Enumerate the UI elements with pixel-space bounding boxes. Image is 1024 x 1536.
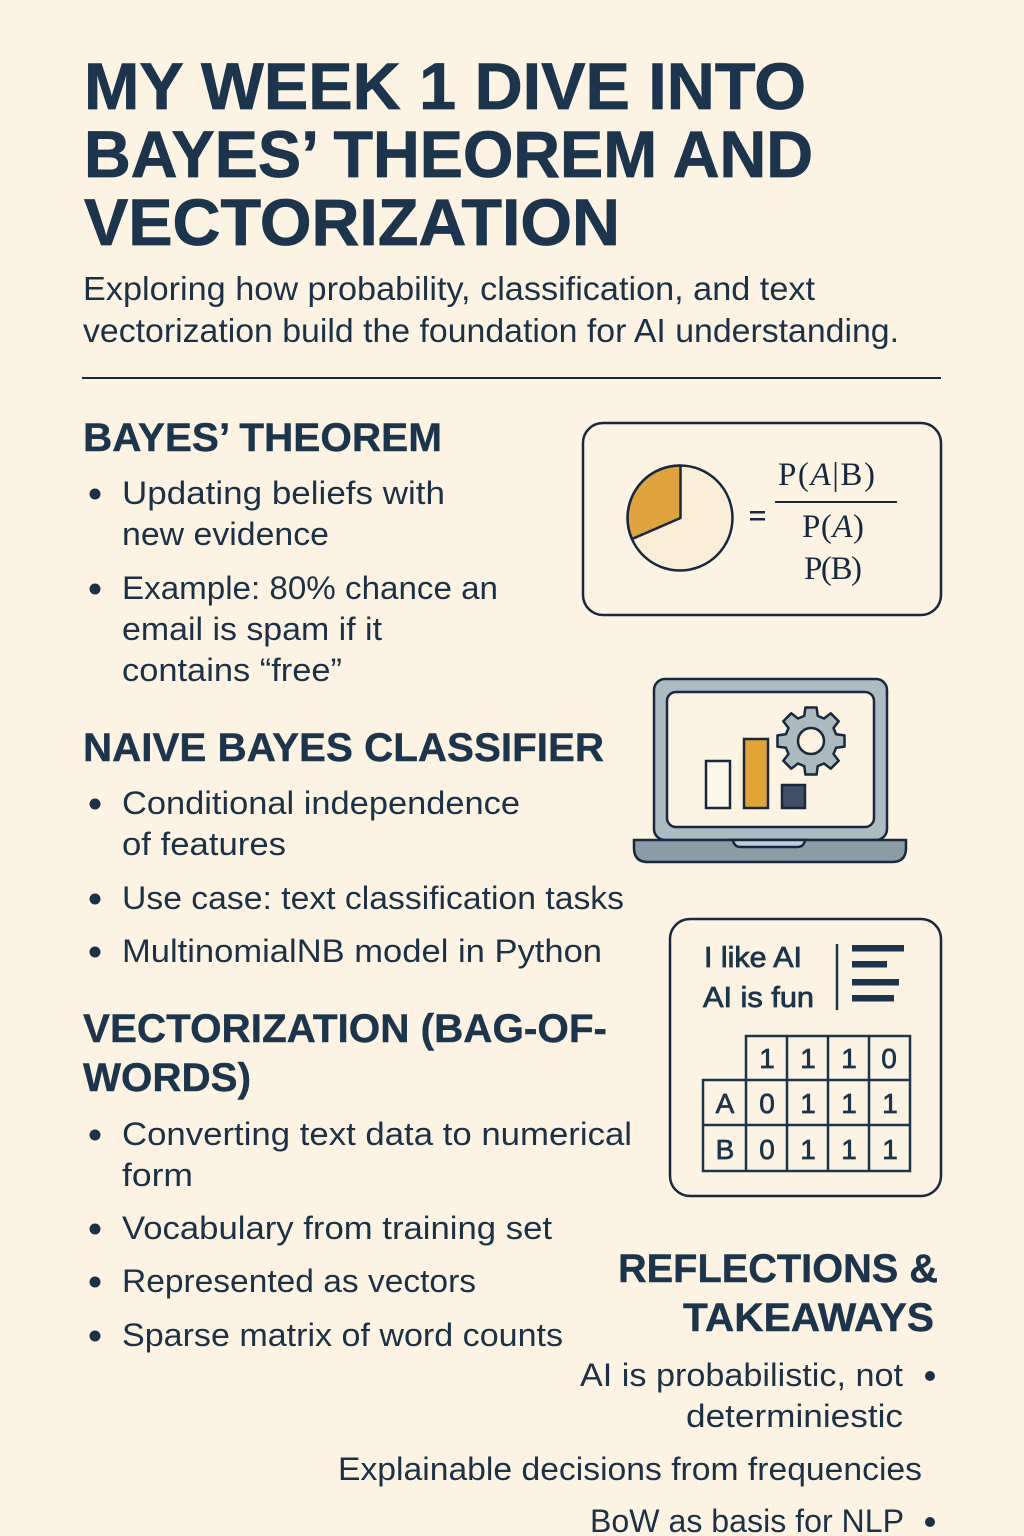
- section: Reflections and Takeaways: [338, 1247, 938, 1536]
- icon: text lines: [852, 945, 904, 1002]
- table: word count matrix: 1: [841, 1088, 857, 1119]
- bullet list: Bayes' Theorem: new evidence: [122, 516, 329, 552]
- bullet list: Bayes' Theorem: Example: 80% chance an: [122, 570, 498, 606]
- table: word count matrix: 1: [800, 1043, 816, 1074]
- bullet list: Naive Bayes: Use case: text classification tasks: [122, 880, 624, 916]
- bullet list: Vectorization: Sparse matrix of word counts: [122, 1317, 563, 1353]
- heading: Vectorization (Bag-of-Words): [83, 1007, 607, 1100]
- heading: Vectorization (Bag-of-Words): VECTORIZATION (BAG-OF-: [83, 1007, 607, 1051]
- section: Naive Bayes Classifier: [83, 726, 624, 969]
- heading: Reflections & Takeaways: [618, 1247, 938, 1340]
- title: VECTORIZATION: [84, 185, 620, 259]
- heading: Naive Bayes Classifier: NAIVE BAYES CLASSIFIER: [83, 726, 604, 770]
- table: word count matrix: [703, 1036, 910, 1171]
- table: word count matrix: 1: [841, 1134, 857, 1165]
- bullet list: Naive Bayes: MultinomialNB model in Python: [122, 933, 602, 969]
- bullet list: Naive Bayes: Conditional independence: [122, 785, 520, 821]
- heading: Vectorization (Bag-of-Words): WORDS): [83, 1056, 251, 1100]
- bullet list: Vectorization: Vocabulary from training set: [122, 1210, 552, 1246]
- bullet list: Vectorization: Converting text data to numerical: [122, 1116, 632, 1152]
- formula: P(B): [804, 551, 862, 587]
- panel: Bayes formula: [583, 423, 941, 615]
- subtitle: [83, 270, 899, 349]
- bullet list: Bayes' Theorem: Updating beliefs with: [122, 475, 445, 511]
- table: word count matrix: 1: [800, 1088, 816, 1119]
- table: word count matrix: 1: [800, 1134, 816, 1165]
- formula: P(A): [802, 509, 864, 545]
- subtitle: vectorization build the foundation for AI understanding.: [83, 312, 899, 349]
- title: MY WEEK 1 DIVE INTO: [84, 49, 806, 123]
- bullet list: Vectorization: Represented as vectors: [122, 1263, 476, 1299]
- title: [84, 49, 813, 259]
- bullet list: Vectorization: form: [122, 1157, 193, 1193]
- bullet list: Bayes' Theorem: email is spam if it: [122, 611, 382, 647]
- bullet list: Reflections: determiniestic: [686, 1398, 903, 1434]
- bullet list: Reflections: [338, 1357, 935, 1536]
- panel: bag-of-words example: [670, 919, 941, 1196]
- table: word count matrix: B: [716, 1134, 734, 1165]
- bullet list: Vectorization: [90, 1116, 632, 1353]
- bullet list: Naive Bayes: of features: [122, 826, 286, 862]
- icon: gear: [777, 707, 845, 775]
- section: Vectorization: [83, 1007, 632, 1353]
- heading: Reflections & Takeaways: REFLECTIONS &: [618, 1247, 938, 1291]
- icon: laptop with chart and gear: [634, 679, 906, 862]
- sample sentences: [703, 942, 814, 1014]
- subtitle: Exploring how probability, classification, and text: [83, 270, 815, 307]
- formula: P(A|B): [778, 457, 875, 493]
- title: BAYES’ THEOREM AND: [84, 117, 813, 191]
- bullet list: Bayes' Theorem: contains “free”: [122, 652, 342, 688]
- table: word count matrix: 0: [881, 1043, 897, 1074]
- section: Bayes' Theorem: [83, 416, 498, 688]
- table: word count matrix: 1: [882, 1134, 898, 1165]
- bullet list: Bayes' Theorem: [90, 475, 498, 688]
- table: word count matrix: 0: [759, 1134, 775, 1165]
- table: word count matrix: 1: [882, 1088, 898, 1119]
- sample sentences: AI is fun: [703, 982, 814, 1014]
- bullet list: Naive Bayes: [90, 785, 624, 969]
- bullet list: Reflections: Explainable decisions from frequencies: [338, 1451, 922, 1487]
- icon: pie chart: [628, 465, 732, 570]
- table: word count matrix: A: [716, 1088, 735, 1119]
- sample sentences: I like AI: [704, 942, 802, 974]
- table: word count matrix: 0: [759, 1088, 775, 1119]
- heading: Reflections & Takeaways: TAKEAWAYS: [683, 1296, 934, 1340]
- bullet list: Reflections: AI is probabilistic, not: [580, 1357, 903, 1393]
- table: word count matrix: 1: [759, 1043, 775, 1074]
- bar chart: [706, 739, 805, 808]
- heading: Bayes' Theorem: BAYES’ THEOREM: [83, 416, 442, 460]
- table: word count matrix: 1: [841, 1043, 857, 1074]
- formula: [775, 457, 897, 587]
- equals sign: [750, 511, 765, 520]
